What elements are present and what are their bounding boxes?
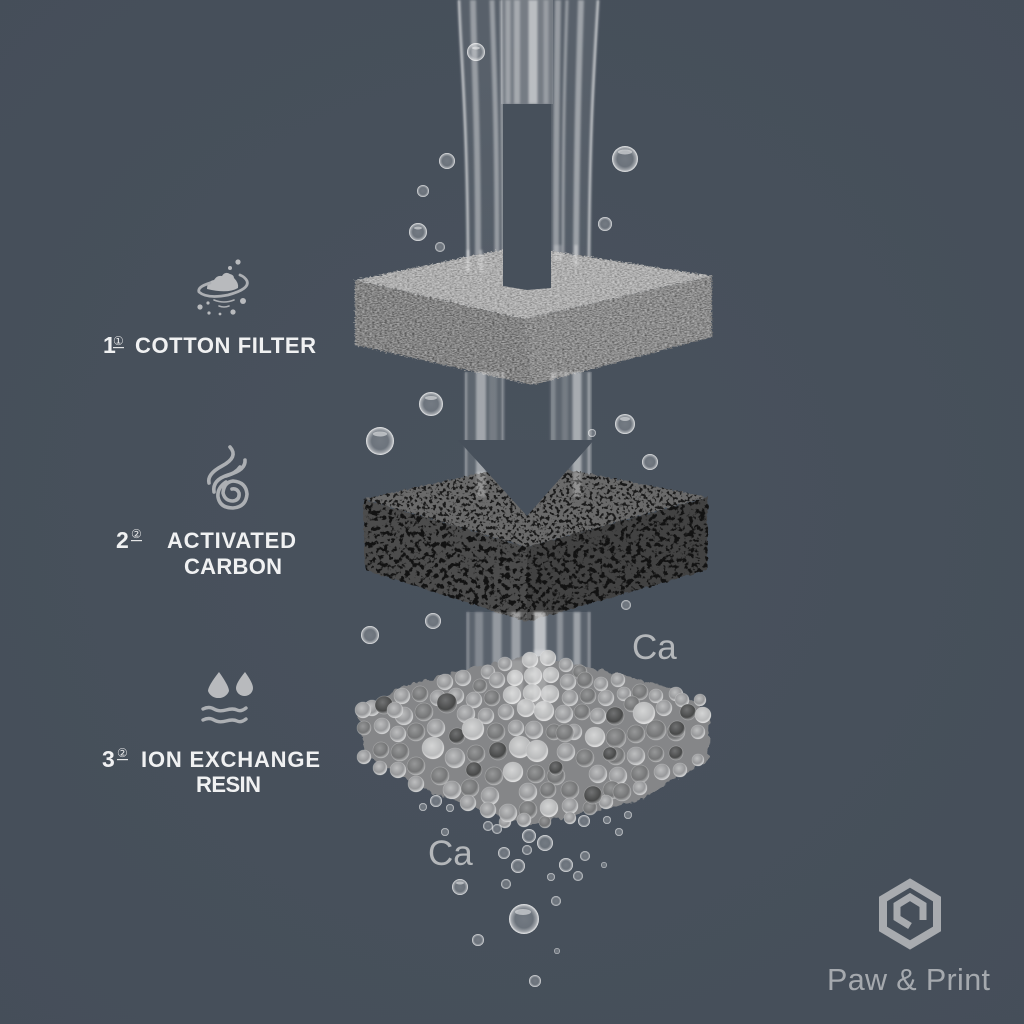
- cotton left face: [355, 280, 532, 385]
- water stream: top: [458, 0, 599, 262]
- flow arrow stem: [503, 104, 551, 290]
- carbon left face: [363, 499, 527, 622]
- icon: cotton swirl: [197, 259, 247, 315]
- stream strands: [459, 0, 598, 262]
- superscript marker 1: ①: [113, 334, 124, 348]
- resin base mass: [358, 655, 710, 826]
- step number 3: 3: [102, 746, 115, 772]
- label: cotton filter: COTTON FILTER: [135, 333, 316, 358]
- superscript marker 2: ②: [131, 527, 142, 541]
- bubbles: middle: [361, 392, 658, 644]
- water over carbon top: [481, 472, 577, 497]
- resin beads: [355, 650, 711, 828]
- channel strands: [466, 372, 589, 500]
- lower stream body: [466, 612, 591, 682]
- water stream: between cotton and carbon: [465, 372, 592, 500]
- flow arrow head: [458, 440, 594, 516]
- water stream: over cotton top: [468, 245, 576, 272]
- left channel body: [465, 372, 503, 496]
- lower stream strands: [468, 612, 589, 690]
- bubbles: upper: [409, 43, 638, 252]
- logo mark: hexagon: [883, 883, 937, 945]
- step number 2: 2: [116, 527, 129, 553]
- bubble highlights: [373, 46, 632, 915]
- cotton right face: [524, 276, 712, 385]
- highlighted beads: [355, 702, 371, 718]
- label: resin: RESIN: [196, 772, 261, 797]
- water stream: between carbon and resin: [466, 612, 591, 690]
- calcium label: lower: Ca: [428, 834, 473, 873]
- step number 1: 1: [103, 332, 116, 358]
- carbon top face: [363, 462, 708, 547]
- activated carbon block: [363, 462, 708, 622]
- icon: carbon swirl: [209, 447, 247, 508]
- stream body: [458, 0, 599, 262]
- stage 3: ion exchange resin: [102, 672, 320, 797]
- ion exchange resin bed: [355, 650, 711, 828]
- right channel body: [551, 372, 592, 496]
- carbon right face: [527, 497, 708, 622]
- stage 1: cotton filter: [103, 259, 316, 358]
- superscript marker 3: ②: [117, 746, 128, 760]
- water light through resin: [517, 650, 540, 708]
- logo wordmark: Paw & Print: [827, 963, 991, 997]
- stage 2: activated carbon: [116, 447, 296, 579]
- bubbles: falling below resin: [419, 795, 632, 987]
- icon: drops and waves: [203, 672, 253, 722]
- label: ion exchange: ION EXCHANGE: [141, 747, 320, 772]
- cotton top face: [355, 246, 712, 319]
- label: carbon second line: CARBON: [184, 554, 282, 579]
- cotton filter block: [355, 246, 712, 385]
- calcium label: upper: Ca: [632, 628, 677, 667]
- stream centre glow: [501, 0, 553, 104]
- label: activated carbon: ACTIVATED: [167, 528, 296, 553]
